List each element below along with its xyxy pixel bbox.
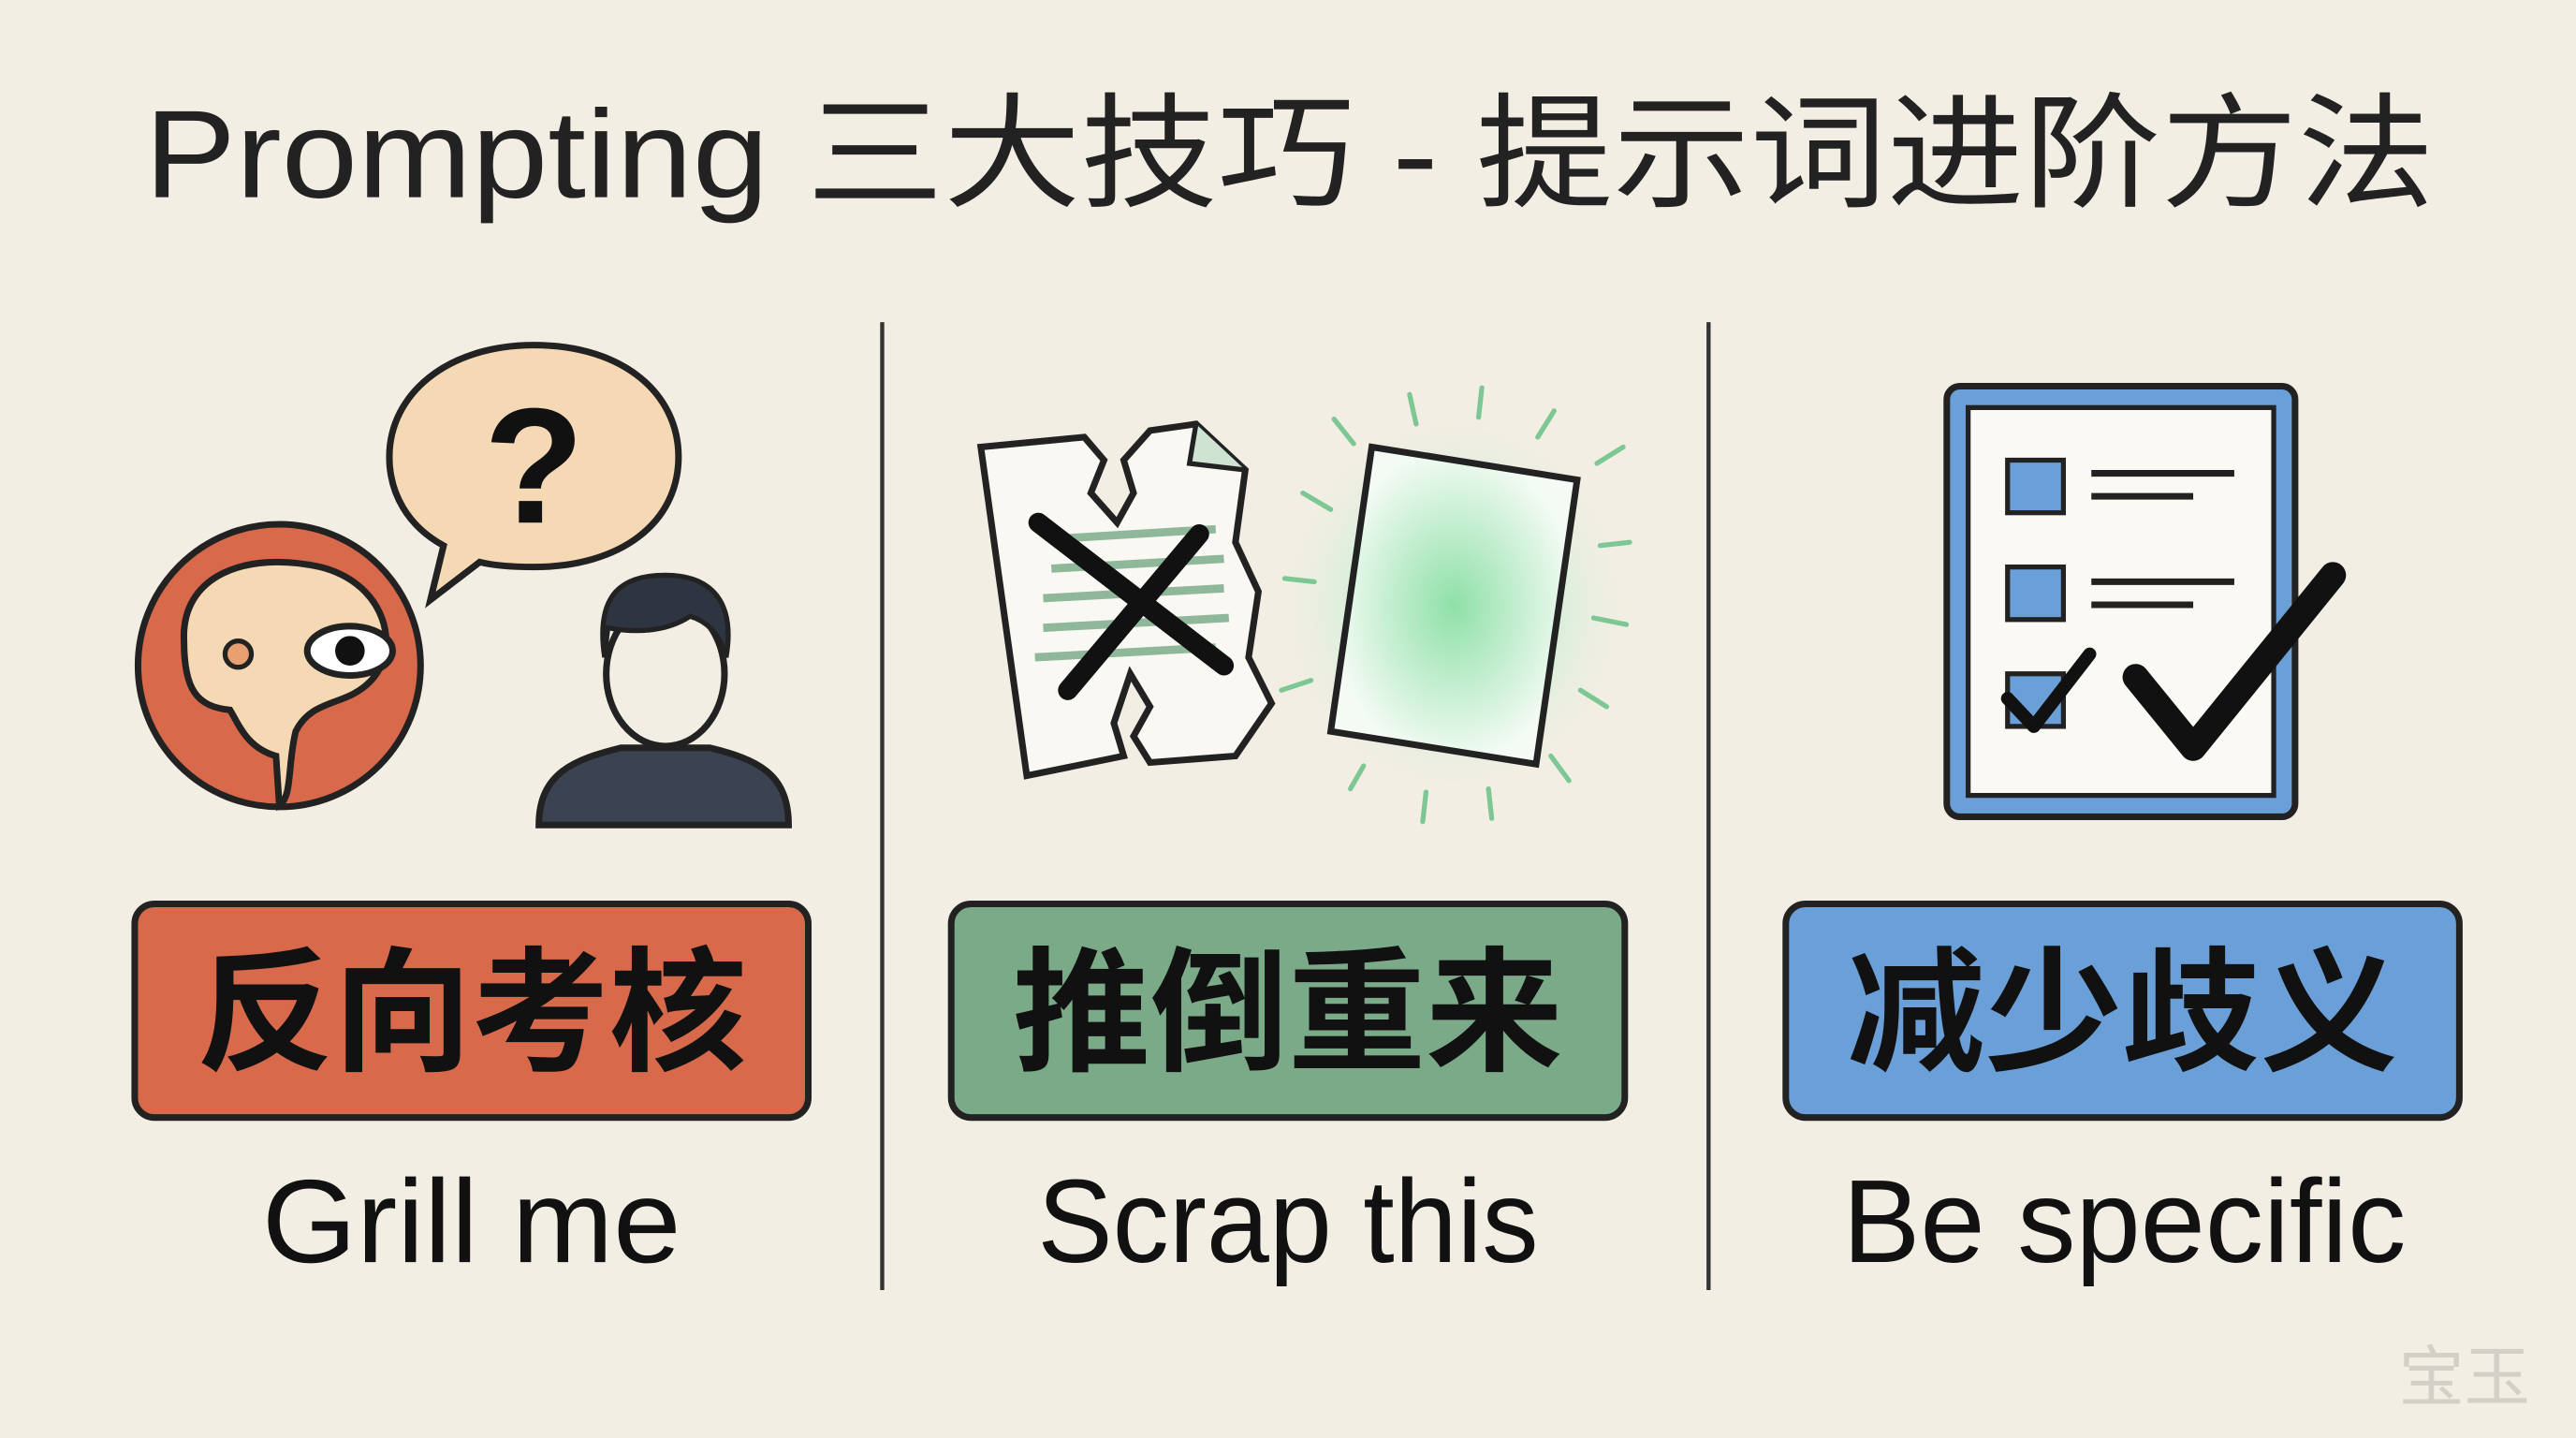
- icon: torn paper with X: [981, 424, 1271, 776]
- icon: scrap this (torn crossed paper and glowing new page): [981, 388, 1643, 822]
- icon: grill me (AI face, speech bubble, person): [138, 345, 788, 825]
- icon: speech bubble with question mark: ?: [484, 374, 584, 558]
- icon: glowing blank page: [1265, 388, 1643, 822]
- label box: 减少歧义: 减少歧义: [1848, 938, 2398, 1089]
- label box: 反向考核: 反向考核: [197, 938, 747, 1089]
- icon: person: [539, 575, 788, 825]
- icon: AI face circle: [138, 524, 420, 807]
- label box: 推倒重来: [951, 903, 1625, 1118]
- icon: speech bubble with question mark: [389, 345, 679, 600]
- label box: 反向考核: [135, 903, 809, 1118]
- title: Prompting 三大技巧 - 提示词进阶方法: [144, 85, 2435, 225]
- label box: 推倒重来: 推倒重来: [1013, 938, 1563, 1089]
- subtitle: Grill me: Grill me: [262, 1155, 681, 1287]
- watermark: 宝玉: [2398, 1341, 2530, 1415]
- subtitle: Scrap this: Scrap this: [1037, 1155, 1539, 1287]
- subtitle: Be specific: Be specific: [1842, 1155, 2406, 1287]
- icon: be specific (checklist clipboard): [1947, 387, 2333, 816]
- label box: 减少歧义: [1786, 903, 2459, 1118]
